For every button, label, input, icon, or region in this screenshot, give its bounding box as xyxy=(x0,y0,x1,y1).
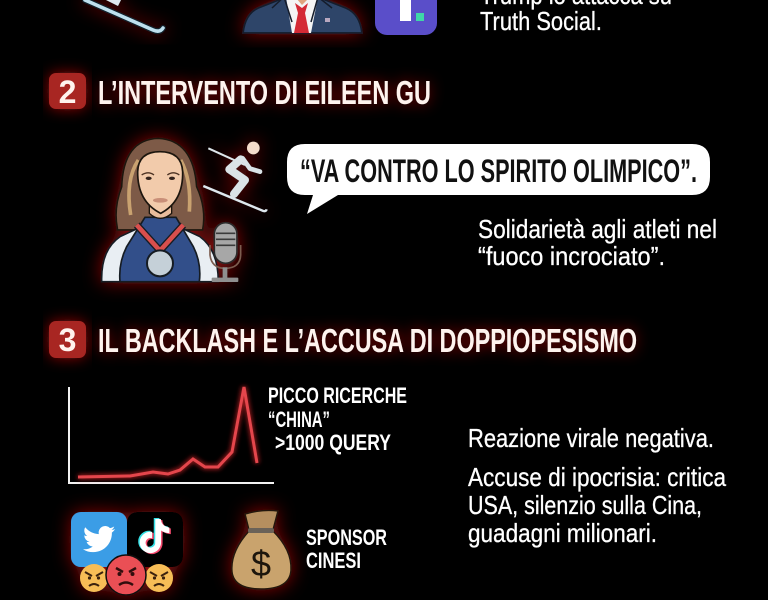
icon: TikTok xyxy=(127,512,183,567)
text: reaction: guadagni milionari. xyxy=(468,518,657,548)
heading 2: L’INTERVENTO DI EILEEN GU xyxy=(98,74,431,111)
text: solidarity: “fuoco incrociato”. xyxy=(478,241,665,271)
text: reaction: Accuse di ipocrisia: critica xyxy=(468,462,726,492)
icon: Trump portrait xyxy=(243,0,362,33)
badge 3 xyxy=(49,321,86,358)
chart label: >1000 QUERY xyxy=(275,430,391,455)
icon: Truth Social app xyxy=(375,0,437,35)
icon: money bag xyxy=(232,510,291,589)
text: Chinese sponsors: SPONSOR xyxy=(306,525,387,550)
text: Trump attack: Truth Social. xyxy=(480,6,602,36)
icon: Eileen Gu portrait with medal, skier and microphone xyxy=(102,138,267,282)
icon: angry emoji right xyxy=(145,564,173,592)
badge 3: 3 xyxy=(59,322,76,358)
heading 2 xyxy=(49,73,431,111)
badge 2: 2 xyxy=(59,74,76,110)
text: solidarity xyxy=(478,214,717,271)
icon: angry emoji center xyxy=(106,555,146,595)
icon: angry emoji left xyxy=(80,564,108,592)
icon: money bag: $ xyxy=(251,543,271,584)
badge 2 xyxy=(49,73,86,110)
text: reaction: Reazione virale negativa. xyxy=(468,423,714,453)
chart label: “CHINA” xyxy=(268,407,330,432)
text: Chinese sponsors xyxy=(306,525,387,573)
text: solidarity: Solidarietà agli atleti nel xyxy=(478,214,717,244)
text: reaction: USA, silenzio sulla Cina, xyxy=(468,490,702,520)
chart label: PICCO RICERCHE xyxy=(268,383,407,408)
text: reaction xyxy=(468,423,726,548)
chart label xyxy=(268,383,407,455)
icon: skier top xyxy=(85,0,163,31)
text: Chinese sponsors: CINESI xyxy=(306,548,361,573)
line chart: search spike xyxy=(69,387,274,483)
speech bubble xyxy=(287,144,710,214)
icons: social media and angry emojis xyxy=(71,512,183,595)
text: Trump attack xyxy=(480,0,672,36)
icon: Twitter xyxy=(71,512,127,567)
